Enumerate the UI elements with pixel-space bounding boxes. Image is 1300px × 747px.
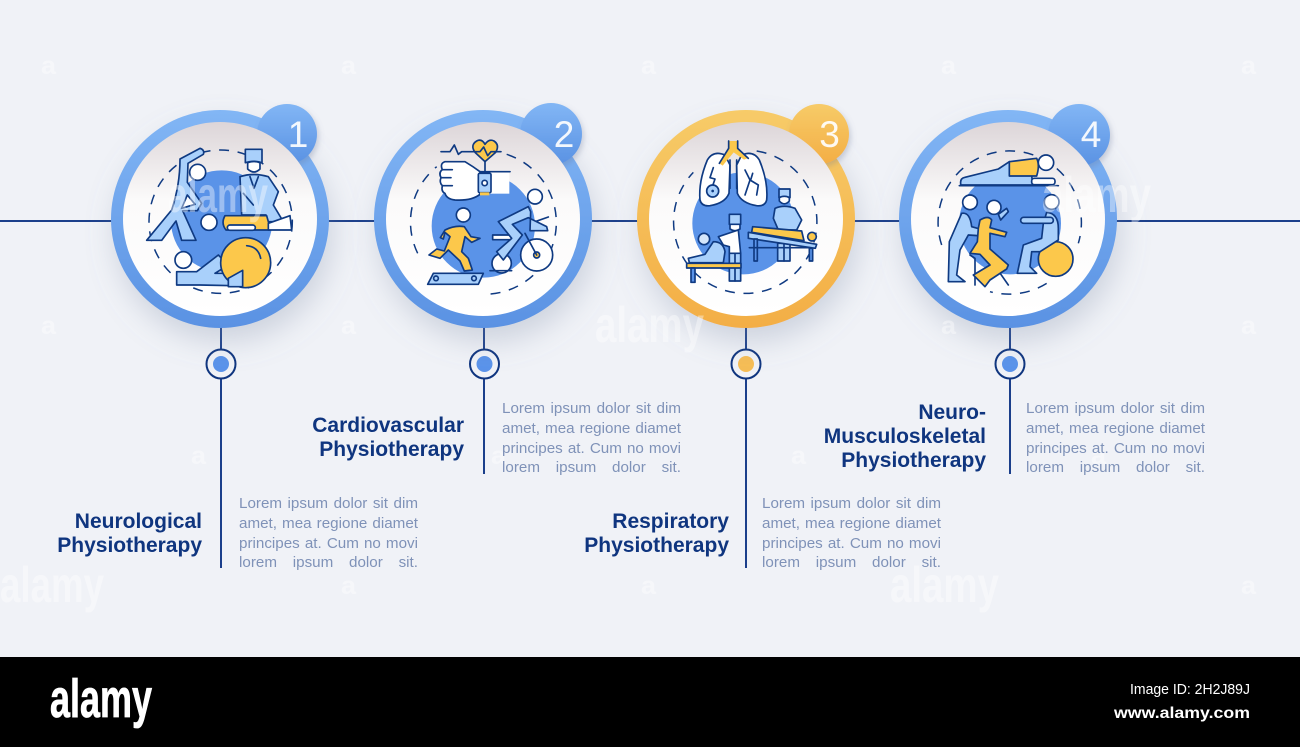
heading: respiratory: Physiotherapy	[584, 534, 729, 557]
connector 3	[732, 326, 760, 568]
watermarks: a	[491, 442, 507, 470]
text block 1: Lorem ipsum dolor sit dim	[239, 495, 418, 512]
watermarks: a	[1241, 52, 1257, 80]
heading: cardiovascular	[312, 414, 464, 461]
connector 4	[996, 326, 1024, 474]
text block 1: amet, mea regione diamet	[239, 515, 418, 532]
circle 2	[374, 103, 592, 328]
watermarks: a	[641, 572, 657, 600]
circle 1: 1	[288, 114, 308, 155]
watermarks: a	[1241, 312, 1257, 340]
heading: cardiovascular: Physiotherapy	[319, 438, 464, 461]
text block 2: principes at. Cum no movi	[502, 440, 681, 457]
watermarks: alamy	[1042, 167, 1151, 223]
circle 1	[111, 104, 329, 328]
text block 2: Lorem ipsum dolor sit dim	[502, 400, 681, 417]
text block 3	[762, 495, 941, 571]
text block 1	[239, 495, 418, 571]
text block 4: lorem ipsum dolor sit.	[1026, 459, 1205, 476]
text block 2: lorem ipsum dolor sit.	[502, 459, 681, 476]
circle 3: 3	[819, 114, 840, 155]
heading: neurological: Physiotherapy	[57, 534, 202, 557]
circle 2: 2	[554, 114, 574, 155]
text block 1: lorem ipsum dolor sit.	[239, 554, 418, 571]
watermarks: a	[941, 52, 957, 80]
text block 4: principes at. Cum no movi	[1026, 440, 1205, 457]
connector 2	[470, 326, 499, 474]
icon: neuro-musculoskeletal physiotherapy	[938, 151, 1081, 294]
heading: neurological	[57, 510, 202, 557]
text block 4: amet, mea regione diamet	[1026, 420, 1205, 437]
watermarks: alamy	[0, 557, 104, 613]
watermarks: a	[191, 442, 207, 470]
text block 3: lorem ipsum dolor sit.	[762, 554, 941, 571]
watermarks: a	[941, 312, 957, 340]
text block 3: Lorem ipsum dolor sit dim	[762, 495, 941, 512]
connector 1	[206, 326, 236, 568]
circle 4	[899, 104, 1117, 328]
icon: cardiovascular physiotherapy	[410, 140, 556, 294]
icon: neurological physiotherapy	[147, 148, 292, 293]
footer bar	[0, 657, 1300, 747]
heading: respiratory: Respiratory	[612, 510, 729, 533]
watermarks: a	[341, 52, 357, 80]
watermarks: a	[1241, 572, 1257, 600]
heading: cardiovascular: Cardiovascular	[312, 414, 464, 437]
heading: neuro-musculoskeletal: Musculoskeletal	[824, 425, 986, 448]
image id: Image ID: 2H2J89J	[1130, 681, 1250, 698]
watermarks: a	[791, 442, 807, 470]
circle 3	[637, 104, 855, 328]
text block 3: amet, mea regione diamet	[762, 515, 941, 532]
horizontal timeline	[0, 220, 1300, 222]
watermarks: alamy	[595, 297, 704, 353]
watermarks	[0, 52, 1257, 613]
footer logo: alamy	[50, 669, 152, 729]
icon: respiratory physiotherapy	[674, 141, 817, 293]
website: www.alamy.com	[1113, 705, 1250, 722]
watermarks: a	[1091, 442, 1107, 470]
watermarks: a	[641, 52, 657, 80]
watermarks: alamy	[890, 557, 999, 613]
watermarks: alamy	[168, 167, 268, 223]
watermarks: a	[341, 572, 357, 600]
text block 2: amet, mea regione diamet	[502, 420, 681, 437]
text block 1: principes at. Cum no movi	[239, 535, 418, 552]
watermarks: a	[341, 312, 357, 340]
heading: neuro-musculoskeletal	[824, 401, 986, 472]
watermarks: a	[41, 312, 57, 340]
text block 4: Lorem ipsum dolor sit dim	[1026, 400, 1205, 417]
heading: neurological: Neurological	[75, 510, 202, 533]
heading: respiratory	[584, 510, 729, 557]
text block 3: principes at. Cum no movi	[762, 535, 941, 552]
text block 2	[502, 400, 681, 476]
heading: neuro-musculoskeletal: Neuro-	[918, 401, 986, 424]
text block 4	[1026, 400, 1205, 476]
heading: neuro-musculoskeletal: Physiotherapy	[841, 449, 986, 472]
circle 4: 4	[1081, 114, 1101, 155]
watermarks: a	[41, 52, 57, 80]
